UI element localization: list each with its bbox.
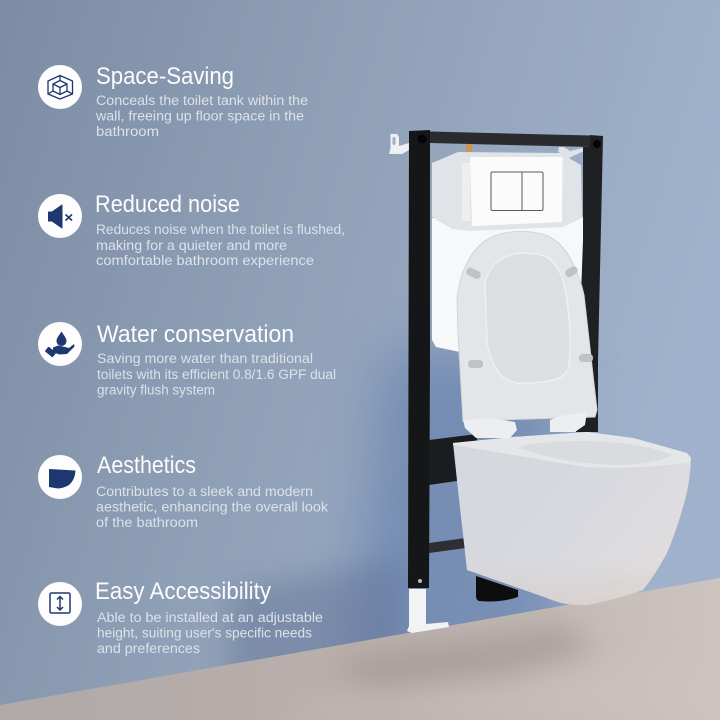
description: Contributes to a sleek and modern [96,484,313,499]
heading: Water conservation [97,321,294,348]
toilet bowl [453,432,691,605]
drain pipe [476,576,518,602]
description: making for a quieter and more [96,238,287,253]
description: Saving more water than traditional [97,351,313,366]
icon: adjustable height [38,582,82,626]
description: Conceals the toilet tank within the [96,93,308,108]
feature: water conservation [38,321,336,398]
description: height, suiting user's specific needs [97,626,312,640]
description: bathroom [96,124,159,139]
toilet installation [389,130,691,633]
icon: toilet silhouette [38,455,82,499]
feature: aesthetics [38,452,328,530]
seat inner recess [485,253,570,383]
heading: Reduced noise [95,191,240,218]
description: Able to be installed at an adjustable [97,610,323,625]
description: wall, freeing up floor space in the [95,108,304,124]
icon: hand and water drop [38,322,82,366]
frame crossbar [429,434,477,485]
frame top rail [430,132,591,147]
description: of the bathroom [96,515,198,530]
description: comfortable bathroom experience [96,253,314,268]
seat lid [457,231,597,421]
frame bolt [418,579,422,583]
feature: space-saving [38,63,308,139]
heading: Space-Saving [96,63,234,90]
description: toilets with its efficient 0.8/1.6 GPF dual [97,367,336,382]
right wall bracket [558,147,584,158]
seat hinges [463,412,587,438]
frame right post [576,135,603,432]
description: and preferences [97,641,200,656]
icon: cube [38,65,82,109]
flush plate [470,157,562,226]
description: gravity flush system [97,382,215,398]
left wall bracket [389,134,409,154]
bowl rim highlight [453,432,691,468]
icon: muted speaker [38,194,82,238]
cistern lower body [432,217,586,352]
wall shading [230,350,560,700]
valve [466,144,472,152]
flush buttons [491,172,543,210]
description: Reduces noise when the toilet is flushed, [96,222,345,237]
bowl opening [517,441,673,465]
bowl bottom tint [466,540,671,605]
seat bumpers [465,265,593,368]
frame lower crossbar [429,538,466,553]
heading: Aesthetics [97,452,196,479]
cistern head [432,152,582,231]
frame foot [407,589,449,633]
floor lower highlight [280,650,720,720]
floor shadow [330,622,600,690]
frame holes [418,134,601,148]
frame left post [408,130,430,588]
feature: reduced noise [38,191,345,268]
floor [0,578,720,720]
description: aesthetic, enhancing the overall look [96,500,328,514]
heading: Easy Accessibility [95,578,272,605]
feature: easy accessibility [38,578,323,656]
cistern white strip [462,163,470,221]
